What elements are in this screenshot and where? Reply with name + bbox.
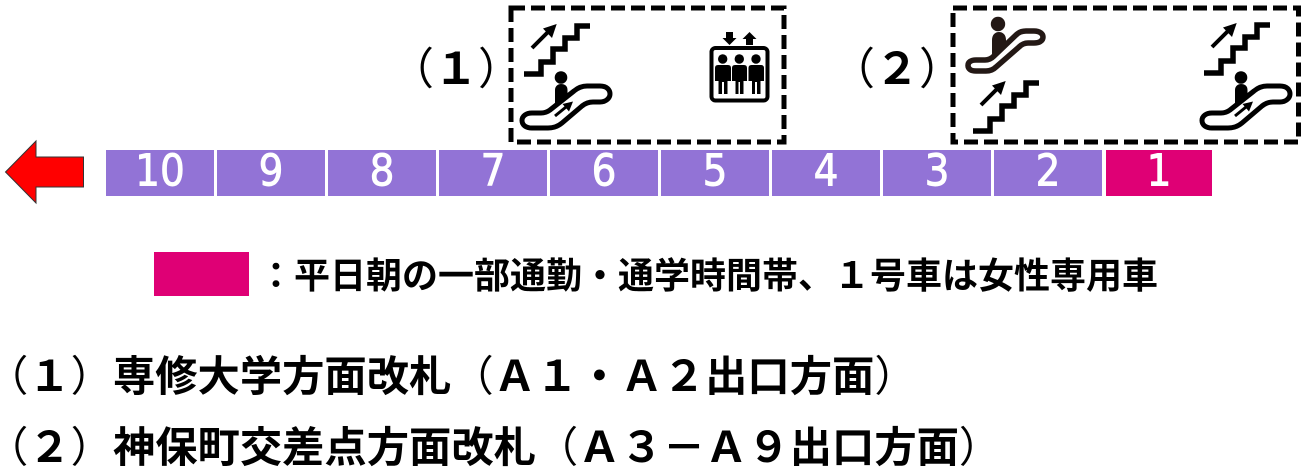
panel: facilities box 1 — [511, 8, 784, 142]
car 4: 4 — [814, 146, 838, 197]
car 5 — [661, 150, 769, 196]
label: exit 2 marker: （２） — [831, 33, 963, 97]
car 3: 3 — [925, 146, 949, 197]
icon: escalator down left — [968, 17, 1043, 71]
icon: elevator — [712, 32, 768, 100]
icon: escalator up right — [1202, 71, 1290, 128]
car 7 — [439, 150, 547, 196]
car 8: 8 — [370, 146, 394, 197]
train cars row — [106, 146, 1212, 197]
car 6 — [550, 150, 658, 196]
car 1 women only — [1106, 150, 1212, 196]
car 4 — [772, 150, 880, 196]
car 10 — [106, 150, 214, 196]
car 2 — [994, 150, 1102, 196]
icon: stairs up right — [1204, 23, 1270, 73]
car 6: 6 — [592, 146, 616, 197]
car 8 — [328, 150, 436, 196]
icon: stairs up — [524, 24, 590, 74]
car 9: 9 — [259, 146, 283, 197]
car 3 — [883, 150, 991, 196]
note: gate 1: （１）専修大学方面改札（Ａ１・Ａ２出口方面） — [0, 343, 917, 404]
arrow: travel direction — [6, 141, 84, 203]
label: exit 1 marker: （１） — [390, 33, 522, 97]
car 9 — [217, 150, 325, 196]
car 7: 7 — [481, 146, 505, 197]
icon: escalator up — [522, 71, 610, 128]
legend swatch — [154, 252, 249, 296]
icon: stairs up lower left — [973, 81, 1039, 131]
car 1 women only: 1 — [1147, 146, 1171, 197]
car 5: 5 — [703, 146, 727, 197]
car 2: 2 — [1036, 146, 1060, 197]
panel: facilities box 2 — [953, 8, 1298, 142]
legend text: ：平日朝の一部通勤・通学時間帯、１号車は女性専用車 — [258, 247, 1158, 299]
car 10: 10 — [135, 146, 185, 197]
